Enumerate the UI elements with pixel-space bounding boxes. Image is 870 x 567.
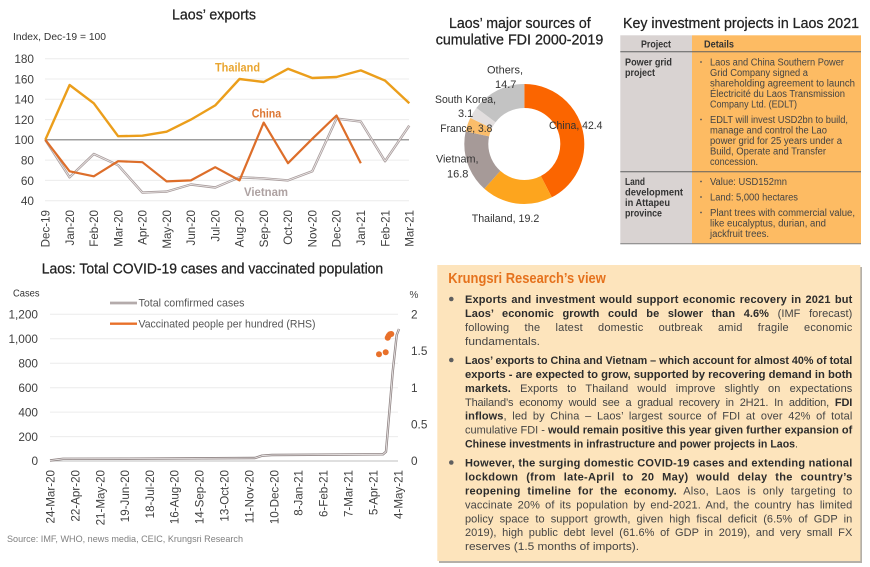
right axis labels: 2 [411, 308, 418, 322]
y axis labels: 160 [14, 72, 34, 86]
x axis date labels: 10-Dec-20 [268, 470, 281, 524]
right axis labels: 0.5 [411, 418, 428, 432]
title: FDI sources: cumulative FDI 2000-2019 [436, 32, 603, 48]
right axis unit: % [410, 290, 418, 301]
x axis date labels: 4-May-21 [392, 470, 405, 519]
left axis labels: 1,200 [8, 308, 38, 322]
row label: land development: development [625, 188, 684, 198]
bullet 3: vaccinate 20% of its population by end-2021. And, the country has limited [465, 500, 852, 512]
x axis date labels: 22-Apr-20 [69, 470, 82, 522]
x axis date labels: 5-Apr-21 [367, 470, 380, 515]
x axis date labels: 8-Jan-21 [292, 470, 305, 516]
x axis labels: Dec-20 [331, 210, 344, 247]
panel: key investment projects table [620, 16, 861, 244]
row details: power grid project: Électricité du Laos Transmission [710, 87, 845, 100]
row details: power grid project: Laos and China Southern Power [710, 58, 845, 68]
donut labels: Others, [487, 64, 523, 76]
row label: land development: province [625, 208, 662, 220]
x axis labels: Feb-20 [88, 210, 101, 247]
donut labels: China, 42.4 [549, 120, 602, 132]
donut labels: Vietnam, [436, 154, 478, 166]
panel: COVID-19 cases chart [8, 262, 428, 525]
bullet 2: exports - are expected to grow, supported by recovering demand in both [465, 369, 853, 381]
legend [110, 298, 316, 330]
axis unit label: Index, Dec-19 = 100 [13, 31, 106, 43]
row details: land development: like eucalyptus, durian, and [710, 218, 826, 230]
row details: power grid project: manage and control the Lao [710, 126, 827, 136]
left axis labels: 600 [18, 381, 38, 395]
bullet 2: cumulative FDI - would remain positive this year given further expansion of [465, 424, 853, 436]
series label: China: China [252, 108, 282, 120]
y axis labels: 140 [14, 93, 34, 107]
y axis labels: 120 [14, 113, 34, 127]
x axis labels: Mar-20 [112, 210, 125, 247]
row label: power grid project: Power grid [625, 58, 672, 68]
row details: land development: Plant trees with commercial value, [710, 208, 855, 219]
donut labels [435, 64, 602, 225]
x axis date labels: 24-Mar-20 [44, 470, 57, 523]
row details: power grid project [700, 58, 855, 168]
panel heading: Krungsri Research’s view [448, 271, 606, 287]
x axis labels: Nov-20 [306, 210, 320, 247]
legend: Total comfirmed cases [138, 298, 245, 310]
donut labels: 3.1 [458, 108, 473, 120]
left axis labels: 0 [31, 454, 38, 468]
row details: power grid project: concession. [710, 157, 758, 168]
bullet 2 [449, 355, 853, 450]
bullet 2: inflows, led by China – Laos’ largest source of FDI at over 42% of total [465, 410, 852, 422]
bullet 3: 2019), high public debt level (61.6% of GDP in 2019), and very small FX [465, 527, 853, 539]
bullet 2: markets. Exports to Thailand would improve slightly on expectations [465, 383, 853, 395]
y axis labels: 60 [21, 174, 34, 188]
x axis labels: May-20 [161, 210, 174, 249]
x axis date labels: 6-Feb-21 [317, 470, 330, 517]
title: key investment projects: Key investment projects in Laos 2021 [623, 16, 859, 32]
donut labels: Thailand, 19.2 [472, 213, 539, 225]
x axis date labels: 11-Nov-20 [243, 470, 256, 523]
panel: FDI donut chart [435, 16, 603, 225]
donut labels: 16.8 [447, 168, 468, 180]
legend: Vaccinated people per hundred (RHS) [138, 318, 316, 330]
line: Thailand [45, 69, 409, 140]
bullet 1: Exports and investment would support economic recovery in 2021 but [465, 294, 853, 306]
row details: power grid project: Grid Company signed a [710, 68, 808, 79]
row details: land development: jackfruit trees. [709, 229, 769, 240]
panel: Laos exports line chart [13, 8, 416, 249]
y axis labels: 100 [14, 133, 34, 147]
right axis labels: 0 [411, 454, 418, 468]
series label: Vietnam: Vietnam [244, 187, 288, 199]
row details: power grid project: power grid for 25 years under a [710, 136, 842, 147]
bullet 3: reserves (1.5 months of imports). [465, 541, 639, 553]
donut labels: 14.7 [495, 79, 516, 91]
row details: land development [700, 177, 855, 240]
x axis labels: Jun-20 [185, 210, 198, 245]
title: FDI sources: Laos’ major sources of [449, 16, 592, 32]
row details: power grid project: Build, Operate and Transfer [710, 146, 827, 158]
left axis unit: Cases [13, 288, 40, 300]
series label: Thailand: Thailand [215, 62, 260, 74]
line: Vietnam [45, 119, 409, 193]
table header: Project [641, 40, 672, 50]
x axis labels: Dec-19 [40, 210, 52, 247]
y axis labels [14, 52, 34, 208]
table header: Details [704, 40, 734, 50]
bullet 3 [449, 457, 853, 553]
table header [641, 40, 734, 50]
line: China [45, 116, 361, 181]
x axis date labels: 14-Sep-20 [193, 470, 206, 524]
y axis labels: 180 [14, 52, 34, 66]
x axis date labels: 19-Jun-20 [119, 470, 132, 522]
x axis labels: Jan-21 [355, 210, 368, 245]
bullet 3: reopening timeline for the economy. Also, Laos is only targeting to [465, 486, 852, 498]
panel: Krungsri Research's view [437, 265, 862, 563]
bullet 1 [449, 294, 853, 348]
bullet 3: However, the surging domestic COVID-19 cases and extending national [465, 457, 852, 469]
line: total confirmed cases [50, 329, 399, 460]
row label: land development: Land [625, 177, 645, 188]
row details: power grid project: Company Ltd. (EDLT) [710, 100, 797, 110]
x axis date labels: 7-Mar-21 [342, 470, 355, 517]
row details: power grid project: EDLT will invest USD2bn to build, [710, 115, 848, 126]
x axis labels: Apr-20 [137, 210, 150, 245]
x axis labels: Sep-20 [258, 210, 271, 247]
row label: power grid project: project [625, 68, 656, 79]
left axis labels: 800 [18, 356, 38, 370]
row details: power grid project: shareholding agreement to launch [710, 78, 855, 89]
x axis date labels: 18-Jul-20 [144, 470, 157, 518]
x axis date labels [44, 470, 405, 525]
y axis labels: 80 [21, 154, 34, 168]
left axis labels [8, 308, 38, 468]
donut labels: France, 3.8 [440, 123, 492, 135]
title: Laos exports: Laos’ exports [172, 8, 256, 24]
x axis labels: Jan-20 [64, 210, 77, 245]
bullet 2: Laos’ exports to China and Vietnam – which account for almost 40% of total [465, 355, 852, 367]
left axis labels: 400 [18, 405, 38, 419]
x axis labels: Oct-20 [282, 210, 295, 245]
bullet 2: Chinese investments in infrastructure and power projects in Laos. [465, 438, 798, 450]
row label: land development [625, 177, 684, 220]
dots: vaccinated people per hundred [376, 331, 394, 357]
x axis labels: Jul-20 [209, 210, 222, 242]
bullet 1: fundamentals. [465, 336, 540, 348]
right axis labels [411, 308, 428, 468]
x axis labels: Feb-21 [379, 210, 392, 247]
y axis labels: 40 [21, 194, 34, 208]
source note: Source: IMF, WHO, news media, CEIC, Krungsri Research [7, 534, 243, 545]
x axis date labels: 13-Oct-20 [218, 470, 231, 522]
bullet 3: lockdown (from late-April to 20 May) would delay the country’s [465, 472, 852, 484]
x axis labels [40, 210, 416, 249]
x axis labels: Mar-21 [404, 210, 416, 247]
row label: land development: in Attapeu [625, 198, 670, 209]
title: COVID-19 cases and vaccination: Laos: Total COVID-19 cases and vaccinated population [42, 262, 383, 278]
bullet 1: Laos’ economic growth could be slower than 4.6% (IMF forecast) [465, 308, 852, 320]
right axis labels: 1.5 [411, 344, 428, 358]
x axis labels: Aug-20 [234, 210, 247, 247]
title: FDI sources [436, 16, 603, 48]
donut labels: South Korea, [435, 94, 496, 106]
bullet 1: following the latest domestic outbreak amid fragile economic [465, 322, 853, 334]
left axis labels: 200 [18, 430, 38, 444]
row label: power grid project [625, 58, 672, 79]
right axis labels: 1 [411, 381, 418, 395]
x axis date labels: 16-Aug-20 [168, 470, 181, 524]
bullet 2: Thailand’s economy would see a gradual recovery in 2H21. In addition, FDI [465, 397, 852, 409]
donut ring [476, 96, 572, 192]
left axis labels: 1,000 [8, 332, 38, 346]
row details: land development: Land: 5,000 hectares [710, 192, 798, 203]
bullet 3: policy space to support growth, given high fiscal deficit (6.5% of GDP in [465, 513, 852, 525]
x axis date labels: 21-May-20 [94, 470, 107, 525]
row details: land development: Value: USD152mn [710, 177, 787, 188]
